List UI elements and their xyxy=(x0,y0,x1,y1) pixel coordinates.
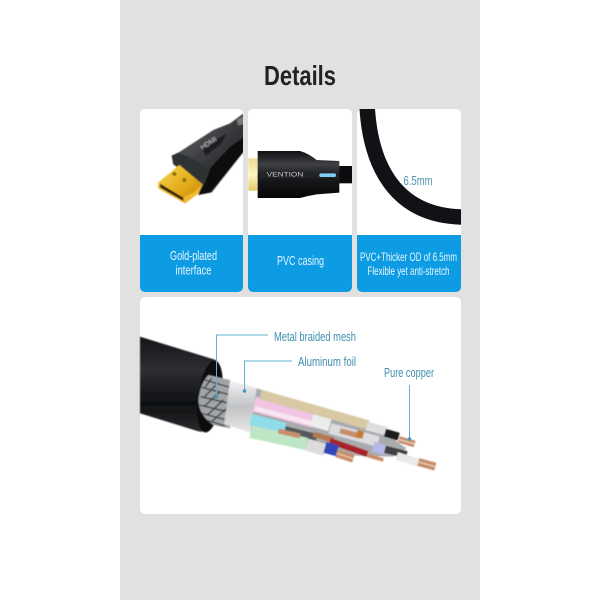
callout: pure copper xyxy=(384,365,434,441)
infographic canvas xyxy=(120,0,480,600)
panel: cable cross-section xyxy=(140,297,461,514)
panel: PVC casing xyxy=(248,109,353,292)
panel: cable thickness xyxy=(357,105,465,292)
green wire xyxy=(251,432,307,444)
aluminum foil xyxy=(224,381,258,432)
gold connector xyxy=(158,165,203,203)
caption: interface xyxy=(176,262,212,278)
wire bundle backing xyxy=(250,388,407,457)
caption: Flexible yet anti-stretch xyxy=(368,264,450,278)
icon: side connector xyxy=(248,151,353,198)
red wire xyxy=(330,441,367,454)
icon: HDMI plug: HDMI xyxy=(200,136,218,152)
callout: aluminum foil: Aluminum foil xyxy=(298,354,356,369)
callout: aluminum foil xyxy=(243,354,356,393)
callout: metal braided mesh: Metal braided mesh xyxy=(274,329,356,344)
outer jacket xyxy=(140,337,222,432)
panel: gold-plated interface xyxy=(140,109,245,292)
caption: Gold-plated xyxy=(170,248,217,263)
illustration: stripped cable xyxy=(140,337,435,467)
grey background band xyxy=(120,0,480,600)
lilac wire xyxy=(373,447,385,450)
callout: pure copper: Pure copper xyxy=(384,365,434,380)
braided mesh xyxy=(198,375,233,428)
blue wire xyxy=(325,447,337,451)
pink wire xyxy=(254,404,313,420)
label: 6.5mm: 6.5mm xyxy=(404,174,432,188)
icon: curved cable xyxy=(367,105,465,217)
title: Details xyxy=(264,60,336,91)
caption: PVC+Thicker OD of 6.5mm xyxy=(360,250,457,264)
tan wire xyxy=(261,394,368,425)
icon: side connector: VENTION xyxy=(267,172,304,179)
cyan wire xyxy=(251,419,285,428)
centre wires xyxy=(330,428,378,442)
icon: HDMI plug xyxy=(158,112,245,203)
callout: metal braided mesh xyxy=(215,329,356,399)
caption: PVC casing xyxy=(277,253,324,268)
